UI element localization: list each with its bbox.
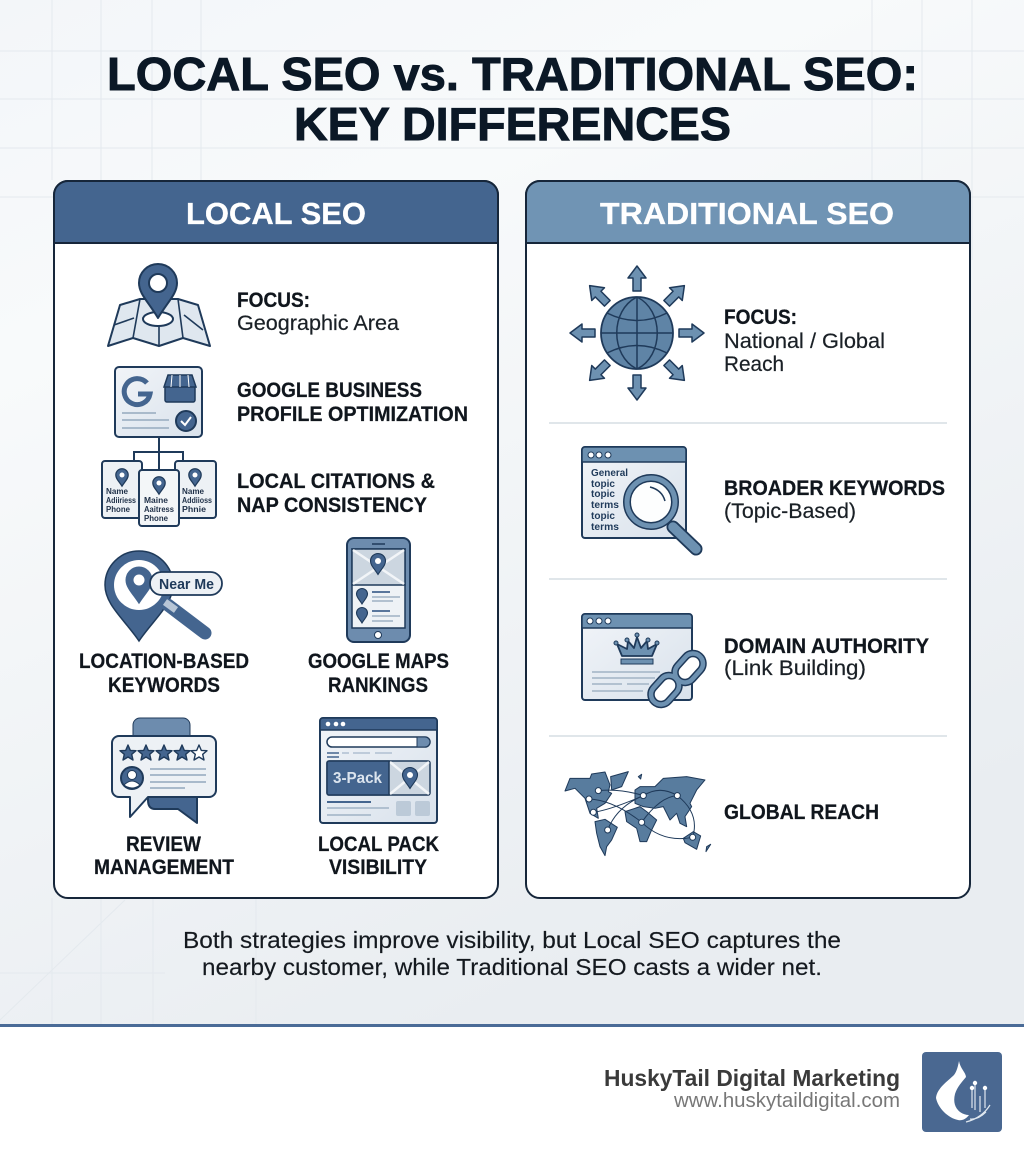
text: global reach: GLOBAL REACH	[724, 801, 879, 824]
icon: location keywords magnifier	[105, 551, 222, 641]
text: broader keywords: (Topic-Based)	[724, 500, 856, 523]
footer brand text	[604, 1065, 900, 1112]
icon: nap citation cards: Addiioss	[182, 496, 212, 505]
text: local pack visibility: LOCAL PACK	[318, 833, 439, 856]
text: broader keywords	[724, 477, 945, 523]
text: review management: MANAGEMENT	[94, 856, 234, 879]
icon: location keywords magnifier: Near Me	[159, 577, 214, 593]
panel: local seo	[54, 181, 498, 898]
local seo header: LOCAL SEO	[186, 196, 366, 231]
icon: local pack browser: 3-Pack	[333, 770, 382, 787]
summary text: Both strategies improve visibility, but Local SEO captures the	[183, 927, 841, 953]
text: google maps rankings: GOOGLE MAPS	[308, 650, 449, 673]
text: local pack visibility: VISIBILITY	[329, 856, 427, 879]
traditional seo header: TRADITIONAL SEO	[600, 196, 894, 231]
local seo header	[54, 181, 498, 243]
panel: traditional seo	[526, 181, 970, 898]
footer brand text: www.huskytaildigital.com	[673, 1090, 900, 1112]
icon: browser with crown and chain	[582, 614, 707, 709]
footer	[0, 1024, 1024, 1154]
icon: nap citation cards: Phnie	[182, 505, 207, 514]
icon: nap citation cards: Phone	[144, 514, 169, 523]
text: local pack visibility	[318, 833, 439, 879]
icon: nap citation cards: Adiiriess	[106, 496, 136, 505]
icon: browser with magnifier: topic	[591, 478, 615, 490]
text: focus geographic area: FOCUS:	[237, 289, 310, 312]
text: focus national global reach: National / Global	[724, 330, 885, 353]
text: google business profile optimization: PROFILE OPTIMIZATION	[237, 403, 468, 426]
icon: browser with magnifier	[582, 447, 696, 549]
icon: local pack browser	[320, 718, 437, 823]
icon: phone with map	[347, 538, 410, 642]
icon: world map with network	[565, 772, 711, 856]
text: domain authority: (Link Building)	[724, 657, 866, 680]
text: local citations and nap consistency	[237, 470, 435, 517]
icon: map with pin	[108, 264, 210, 346]
text: focus national global reach: FOCUS:	[724, 306, 797, 329]
text: local citations and nap consistency: NAP CONSISTENCY	[237, 494, 427, 517]
text: domain authority: DOMAIN AUTHORITY	[724, 635, 929, 658]
icon: huskytail logo	[922, 1052, 1002, 1132]
icon: browser with magnifier: terms	[591, 499, 619, 511]
title	[107, 48, 918, 150]
text: broader keywords: BROADER KEYWORDS	[724, 477, 945, 500]
icon: browser with magnifier: topic	[591, 510, 615, 522]
text: location-based keywords: LOCATION-BASED	[79, 650, 249, 673]
title: KEY DIFFERENCES	[294, 98, 731, 150]
text: google business profile optimization: GOOGLE BUSINESS	[237, 379, 422, 402]
text: location-based keywords: KEYWORDS	[108, 674, 220, 697]
text: local citations and nap consistency: LOCAL CITATIONS &	[237, 470, 435, 493]
text: google maps rankings	[308, 650, 449, 697]
summary text: nearby customer, while Traditional SEO casts a wider net.	[202, 954, 822, 980]
icon: browser with magnifier: General	[591, 467, 628, 479]
icon: nap citation cards: Phone	[106, 505, 131, 514]
icon: nap citation cards	[102, 437, 216, 526]
icon: nap citation cards: Maine	[144, 496, 169, 505]
icon: browser with magnifier: topic	[591, 488, 615, 500]
text: google maps rankings: RANKINGS	[328, 674, 428, 697]
footer brand text: HuskyTail Digital Marketing	[604, 1065, 900, 1091]
icon: nap citation cards: Name	[182, 487, 205, 496]
text: review management: REVIEW	[126, 833, 201, 856]
text: review management	[94, 833, 234, 879]
text: focus geographic area: Geographic Area	[237, 312, 399, 335]
text: focus geographic area	[237, 289, 399, 335]
icon: globe with arrows	[570, 266, 704, 400]
text: focus national global reach: Reach	[724, 353, 784, 376]
icon: nap citation cards: Name	[106, 487, 129, 496]
icon: browser with magnifier: terms	[591, 521, 619, 533]
text: google business profile optimization	[237, 379, 468, 426]
text: location-based keywords	[79, 650, 249, 697]
title: LOCAL SEO vs. TRADITIONAL SEO:	[107, 48, 918, 100]
text: domain authority	[724, 635, 929, 680]
icon: nap citation cards: Aaitress	[144, 505, 175, 514]
traditional seo header	[526, 181, 970, 243]
icon: review bubbles	[112, 718, 216, 823]
text: focus national global reach	[724, 306, 885, 376]
summary text	[183, 927, 841, 980]
icon: business profile card	[115, 367, 202, 470]
